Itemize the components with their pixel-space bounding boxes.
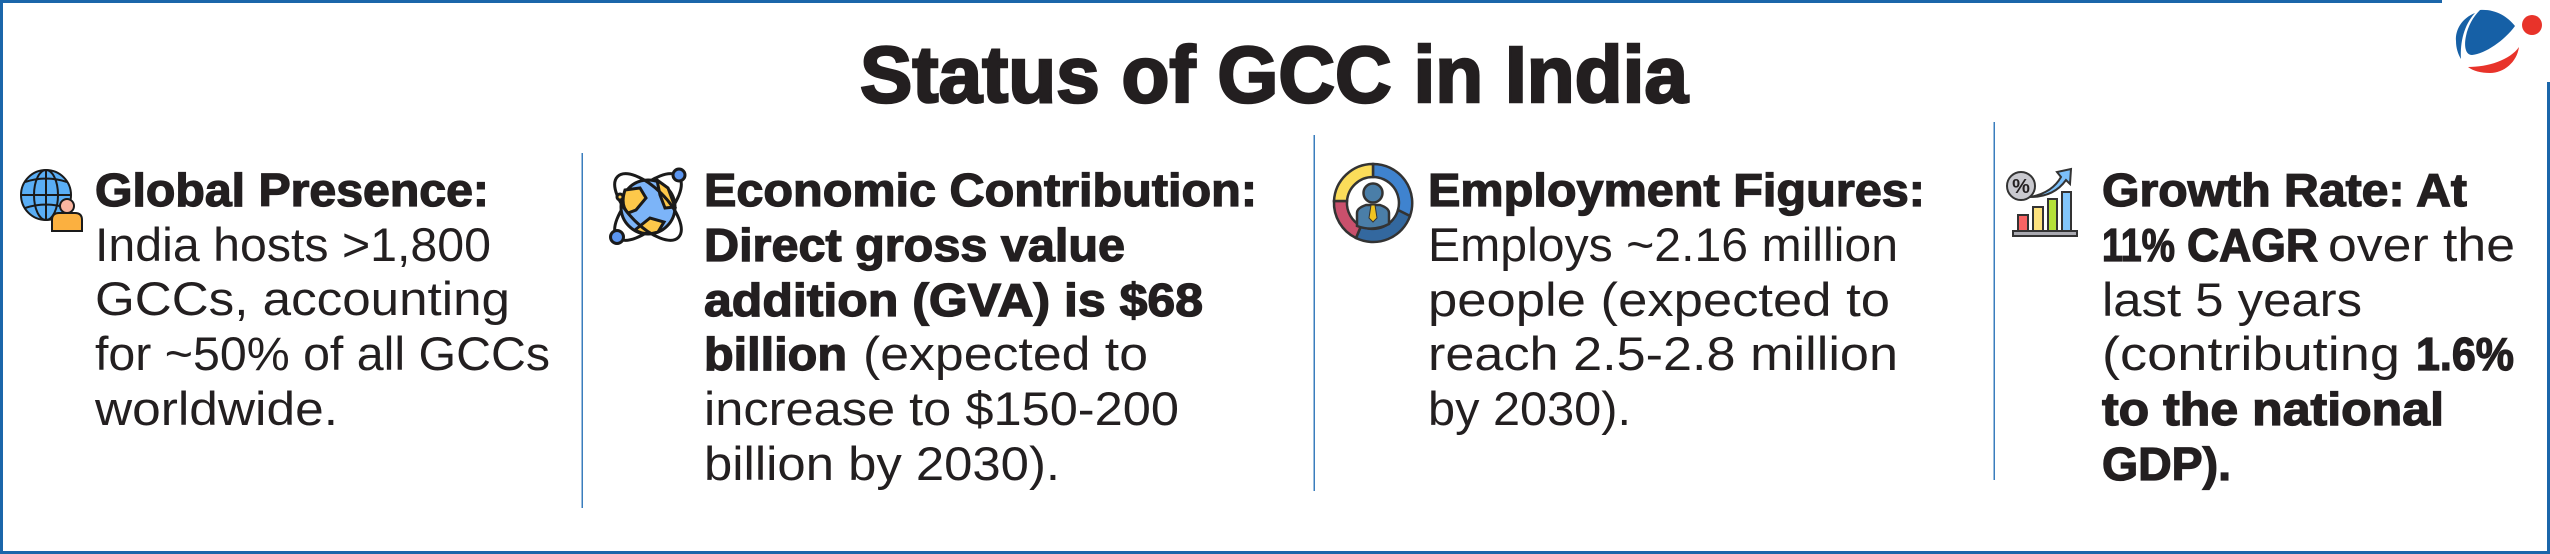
text block: employment figures: Employs ~2.16 million — [1428, 218, 1898, 271]
text block: growth rate: last 5 years — [2102, 273, 2362, 326]
logo — [2456, 10, 2542, 73]
text block: economic contribution: billion by 2030). — [704, 437, 1060, 490]
divider 3 — [1994, 122, 1995, 480]
text block: global presence: India hosts >1,800 — [95, 218, 491, 271]
icon: globe with person — [21, 170, 82, 231]
text block: global presence: worldwide. — [94, 382, 338, 435]
panel: growth rate — [2007, 164, 2515, 490]
text block: employment figures: reach 2.5-2.8 million — [1428, 327, 1898, 380]
title: Status of GCC in India — [860, 30, 1688, 119]
icon: growth bar chart — [2007, 169, 2077, 236]
panel: economic contribution — [604, 163, 1257, 490]
heading: growth rate: Growth Rate: At — [2102, 164, 2467, 216]
icon: globe with orbits — [604, 163, 692, 251]
text block: employment figures: people (expected to — [1428, 273, 1890, 326]
panel: global presence — [21, 164, 550, 435]
text block: growth rate: 11% — [2102, 219, 2175, 271]
text block: growth rate — [2102, 218, 2515, 490]
text block: employment figures — [1428, 218, 1898, 435]
icon: ring chart with person — [1334, 164, 1412, 242]
text block: economic contribution — [704, 219, 1203, 490]
icon: growth bar chart: % — [2012, 176, 2030, 198]
text block: economic contribution: (expected to — [863, 327, 1148, 380]
heading: employment figures: Employment Figures: — [1428, 164, 1925, 216]
text block: global presence: for ~50% of all GCCs — [95, 327, 550, 380]
text block: growth rate: over the — [2328, 218, 2515, 271]
text block: economic contribution: increase to $150-200 — [704, 382, 1179, 435]
text block: growth rate: CAGR — [2187, 219, 2318, 271]
text block: economic contribution: billion — [704, 328, 847, 380]
text block: economic contribution: Direct gross value — [704, 219, 1125, 271]
text block: growth rate: 1.6% — [2416, 328, 2514, 380]
text block: growth rate: to the national — [2102, 383, 2444, 435]
heading: global presence: Global Presence: — [95, 164, 489, 216]
text block: growth rate: GDP). — [2102, 438, 2231, 490]
divider 2 — [1314, 135, 1315, 491]
text block: employment figures: by 2030). — [1428, 382, 1631, 435]
text block: economic contribution: addition (GVA) is $68 — [704, 274, 1203, 326]
text block: global presence: GCCs, accounting — [95, 272, 510, 325]
divider 1 — [582, 153, 583, 508]
text block: global presence — [94, 218, 550, 435]
text block: growth rate: (contributing — [2102, 327, 2400, 380]
panel: employment figures — [1334, 164, 1925, 435]
heading: economic contribution: Economic Contribution: — [704, 164, 1257, 216]
